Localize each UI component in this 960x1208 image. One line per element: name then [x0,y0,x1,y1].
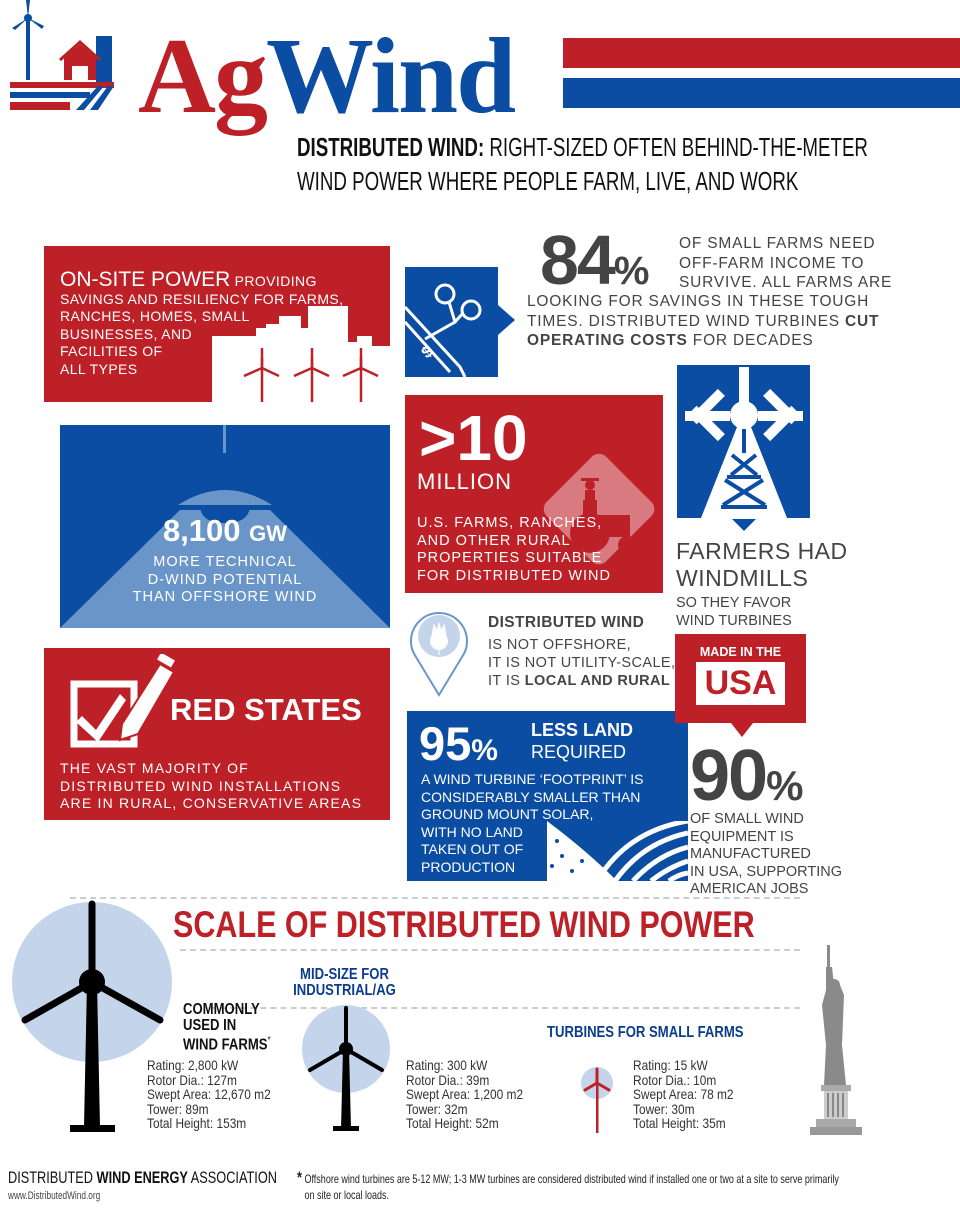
farmers had windmills text [676,538,848,628]
label: mid-size: MID-SIZE FOR [300,966,389,983]
panel: 95% less land: A WIND TURBINE ‘FOOTPRINT’ IS [421,771,643,787]
panel: 95% less land: LESS LAND [531,720,633,740]
distributed wind text [488,614,675,689]
on-site text: SAVINGS AND RESILIENCY FOR FARMS, [60,290,343,306]
icon: windmill [677,365,810,531]
header stripes [563,38,960,108]
90% text [690,811,842,897]
distributed wind text: IT IS NOT UTILITY-SCALE, [488,655,675,671]
90% text: AMERICAN JOBS [690,881,808,897]
panel: 95% less land: TAKEN OUT OF [421,841,523,857]
red states text: ARE IN RURAL, CONSERVATIVE AREAS [60,795,362,811]
stats: large turbine [147,1057,271,1131]
footer: DWEA [8,1168,277,1202]
90% text: IN USA, SUPPORTING [690,864,842,880]
footnote [297,1168,839,1202]
90% text: OF SMALL WIND [690,811,804,827]
stat: 84%: 84% [540,221,647,299]
icon: checkbox with pencil [70,654,175,748]
farmers had windmills text: FARMERS HAD [676,538,848,564]
stats: large turbine: Total Height: 153m [147,1115,246,1131]
label: commonly used: WIND FARMS* [183,1035,271,1053]
stat: 90%: 90% [690,736,801,816]
panel: 95% less land: GROUND MOUNT SOLAR, [421,806,593,822]
stat: 84%: OPERATING COSTS FOR DECADES [527,332,814,349]
icon: flag [547,821,688,881]
distributed wind text: DISTRIBUTED WIND [488,614,644,631]
footer: DWEA: www.DistributedWind.org [8,1190,100,1202]
label: commonly used: USED IN [183,1016,236,1034]
red states text: DISTRIBUTED WIND INSTALLATIONS [60,778,341,794]
icon: lamp and light beam [60,425,390,628]
stat: 84% [527,221,892,349]
badge: made in the USA: MADE IN THE [700,645,781,659]
footnote: * Offshore wind turbines are 5-12 MW; 1-3 MW turbines are considered distributed wind if installed one or two at a site to serve primarily [297,1168,839,1187]
subtitle [297,132,868,196]
stats: mid turbine: Swept Area: 1,200 m2 [406,1086,523,1102]
icon: statue of liberty [810,945,862,1135]
footnote: on site or local loads. [304,1188,389,1202]
panel: 95% less land: CONSIDERABLY SMALLER THAN [421,788,640,804]
stat: 84%: OFF-FARM INCOME TO [679,254,864,272]
stat: 84%: TIMES. DISTRIBUTED WIND TURBINES CUT [527,312,879,330]
stat: 84%: SURVIVE. ALL FARMS ARE [679,274,892,291]
90% text: EQUIPMENT IS [690,828,794,844]
title: AgWind: AgWind [138,17,514,136]
footer: DWEA: DISTRIBUTED WIND ENERGY ASSOCIATION [8,1168,277,1187]
badge: made in the USA: USA [705,664,776,702]
icon: scissors cutting dollar: $ [419,343,436,362]
label: mid-size: INDUSTRIAL/AG [293,982,396,998]
>10 text: >10 [419,402,528,474]
icon: small turbine [581,1067,613,1133]
on-site text [60,268,343,376]
panel: >10 million: MILLION [417,469,512,494]
farmers had windmills text: WINDMILLS [676,565,808,591]
stats: mid turbine [406,1057,523,1131]
logo icon [10,0,114,110]
stats: small turbine [633,1057,734,1131]
distributed wind text: IS NOT OFFSHORE, [488,637,631,653]
panel: >10 million: FOR DISTRIBUTED WIND [417,568,611,584]
on-site text: ALL TYPES [60,360,138,376]
stats: small turbine: Rating: 15 kW [633,1057,708,1073]
panel: 95% less land [407,711,688,881]
stats: large turbine: Tower: 89m [147,1100,209,1116]
on-site text: BUSINESSES, AND [60,326,192,342]
panel: >10 million: AND OTHER RURAL [417,532,571,548]
stats: large turbine: Rotor Dia.: 127m [147,1072,237,1088]
icon: scissors cutting dollar [405,267,515,377]
distributed wind text: IT IS LOCAL AND RURAL [488,673,670,689]
90% text: MANUFACTURED [690,846,811,862]
stat: 84%: LOOKING FOR SAVINGS IN THESE TOUGH [527,293,869,310]
stats: small turbine: Rotor Dia.: 10m [633,1072,716,1088]
red states text: THE VAST MAJORITY OF [60,760,249,776]
label: commonly used [183,1001,271,1053]
on-site text: ON-SITE POWER PROVIDING [60,268,317,291]
stats: large turbine: Swept Area: 12,670 m2 [147,1086,271,1102]
panel: red states [44,648,390,820]
subtitle: WIND POWER WHERE PEOPLE FARM, LIVE, AND WORK [297,166,798,196]
panel: 95% less land: PRODUCTION [421,858,515,874]
heading: scale of distributed wind power: SCALE OF DISTRIBUTED WIND POWER [173,904,755,945]
subtitle: DISTRIBUTED WIND: RIGHT-SIZED OFTEN BEHIND-THE-METER [297,132,868,162]
panel: 95% less land: REQUIRED [531,742,626,762]
stats: mid turbine: Rotor Dia.: 39m [406,1072,489,1088]
red states heading: RED STATES [170,692,362,727]
8100 text: D-WIND POTENTIAL [148,572,302,588]
badge: made in the USA [675,634,806,737]
label: commonly used: COMMONLY [183,1001,260,1018]
panel: 8,100 GW [60,425,390,628]
8100 text: 8,100 GW [163,513,287,548]
farmers had windmills text: WIND TURBINES [676,612,792,628]
icon: location pin [410,612,468,697]
on-site text: FACILITIES OF [60,343,162,359]
stats: large turbine: Rating: 2,800 kW [147,1057,238,1073]
8100 text: MORE TECHNICAL [153,554,297,570]
panel: >10 million: U.S. FARMS, RANCHES, [417,515,602,531]
panel: 95% less land: WITH NO LAND [421,824,523,840]
on-site text: RANCHES, HOMES, SMALL [60,308,250,324]
panel: >10 million [405,395,663,593]
stats: mid turbine: Rating: 300 kW [406,1057,487,1073]
stats: small turbine: Swept Area: 78 m2 [633,1086,734,1102]
panel: on-site power [44,246,390,402]
icon: tractor sign [544,454,654,564]
stats: small turbine: Tower: 30m [633,1100,695,1116]
8100 text: THAN OFFSHORE WIND [133,589,317,605]
8100 text [132,513,317,605]
stat: 84%: OF SMALL FARMS NEED [679,235,875,252]
icon: mid turbine [302,1005,390,1131]
label: mid-size [293,966,396,998]
skyline with turbines [212,306,390,402]
panel: >10 million: PROPERTIES SUITABLE [417,550,602,566]
label: small farms: TURBINES FOR SMALL FARMS [547,1024,744,1041]
stats: mid turbine: Total Height: 52m [406,1115,499,1131]
95% text: 95% [419,717,498,770]
red states text [60,760,362,811]
stats: small turbine: Total Height: 35m [633,1115,726,1131]
stats: mid turbine: Tower: 32m [406,1100,468,1116]
icon: large turbine [12,900,172,1132]
farmers had windmills text: SO THEY FAVOR [676,595,791,611]
